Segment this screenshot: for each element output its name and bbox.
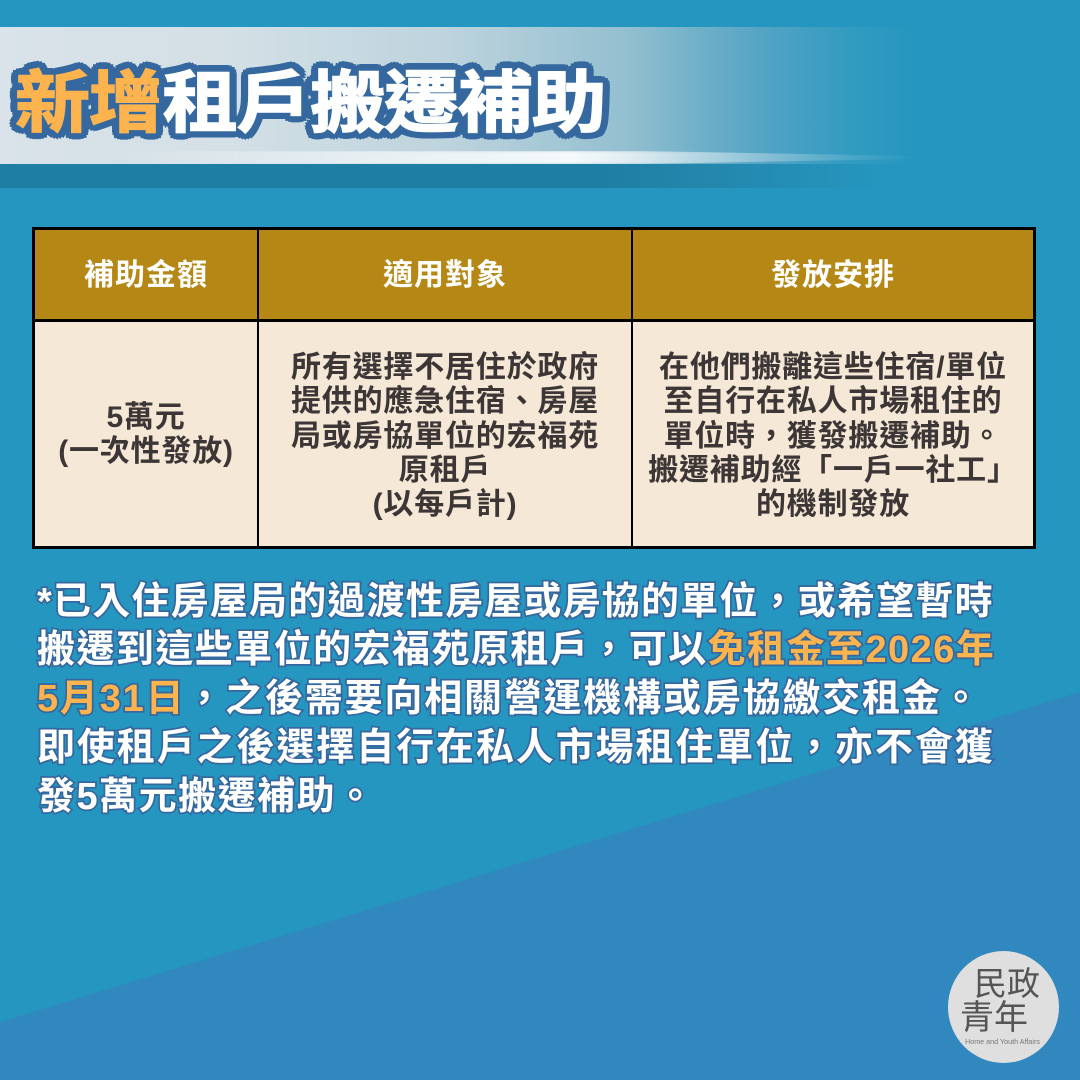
cell text: eligibility: 所有選擇不居住於政府 bbox=[291, 351, 599, 384]
cell text: arrangement: 搬遷補助經「一戶一社工」 bbox=[648, 454, 1018, 487]
cell text: amount: 5萬元 bbox=[106, 401, 186, 434]
header: eligibility bbox=[259, 230, 631, 319]
title banner bbox=[0, 27, 904, 188]
header: arrangement bbox=[633, 230, 1033, 319]
cell: arrangement bbox=[633, 322, 1033, 546]
logo text: 青年: 青年 bbox=[960, 999, 1028, 1037]
cell text: amount: (一次性發放) bbox=[58, 435, 234, 468]
banner light gradient bbox=[0, 27, 1080, 164]
cell text: eligibility: 提供的應急住宿、房屋 bbox=[291, 376, 599, 420]
logo caption: Home and Youth Affairs bbox=[965, 1037, 1040, 1046]
cell text: arrangement: 的機制發放 bbox=[756, 488, 910, 521]
cell text: eligibility: (以每戶計) bbox=[373, 488, 517, 521]
header text: eligibility: 適用對象 bbox=[383, 259, 507, 292]
note line 5: 發5萬元搬遷補助。 bbox=[37, 765, 376, 820]
banner highlight line bbox=[198, 151, 897, 164]
note line 2: 搬遷到這些單位的宏福苑原租戶，可以免租金至2026年 bbox=[37, 618, 995, 673]
cell text: amount bbox=[58, 401, 234, 468]
cell: eligibility bbox=[259, 322, 631, 546]
note line 1: *已入住房屋局的過渡性房屋或房協的單位，或希望暫時 bbox=[37, 570, 994, 625]
banner dark lower strip bbox=[0, 164, 1080, 188]
cell text: eligibility bbox=[291, 350, 599, 521]
note line 3: 5月31日，之後需要向相關營運機構或房協繳交租金。 bbox=[37, 667, 981, 722]
cell text: arrangement bbox=[648, 350, 1018, 521]
cell: amount bbox=[35, 322, 257, 546]
header text: arrangement: 發放安排 bbox=[771, 259, 895, 292]
cell text: arrangement: 在他們搬離這些住宿/單位 bbox=[659, 351, 1007, 384]
logo text: 民政: 民政 bbox=[974, 965, 1040, 1002]
note line 4: 即使租戶之後選擇自行在私人市場租住單位，亦不會獲 bbox=[37, 716, 995, 771]
logo bbox=[948, 951, 1059, 1063]
cell text: arrangement: 單位時，獲發搬遷補助。 bbox=[664, 411, 1002, 455]
note text bbox=[34, 570, 996, 820]
header text: amount: 補助金額 bbox=[84, 259, 208, 292]
cell text: eligibility: 原租戶 bbox=[399, 454, 491, 487]
title: 新增租戶搬遷補助 bbox=[15, 65, 605, 141]
cell text: eligibility: 局或房協單位的宏福苑 bbox=[291, 420, 599, 453]
header: amount bbox=[35, 230, 257, 319]
cell text: arrangement: 至自行在私人市場租住的 bbox=[664, 385, 1002, 418]
table bbox=[32, 227, 1036, 549]
